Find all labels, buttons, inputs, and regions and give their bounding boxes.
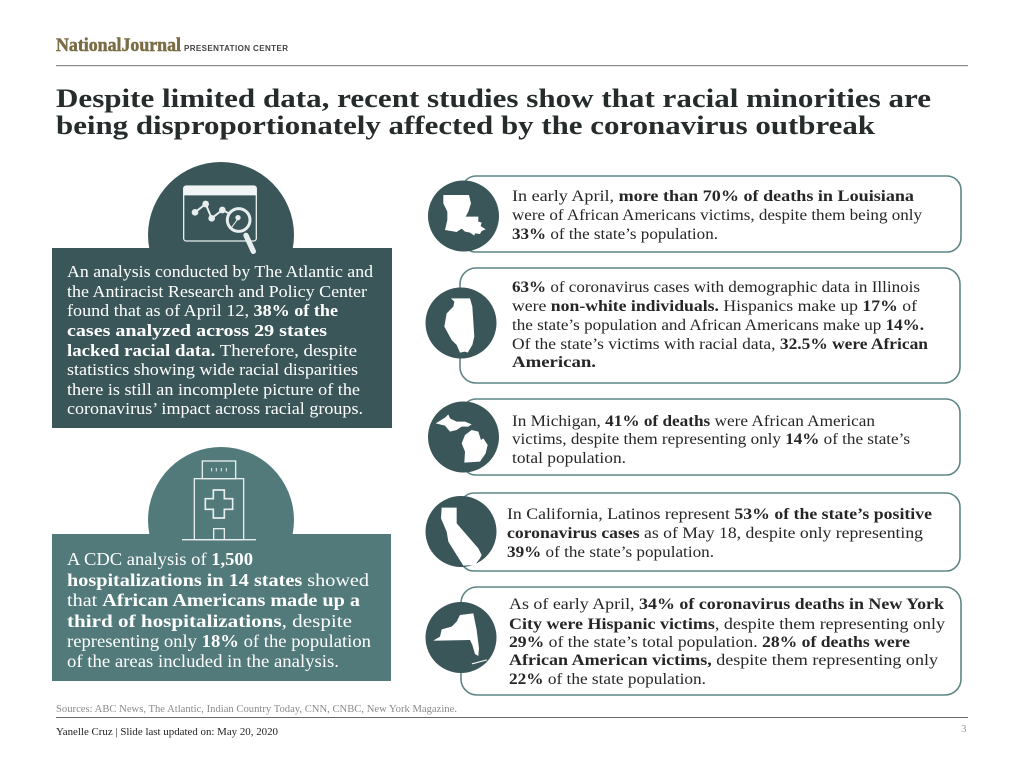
callout: Illinois xyxy=(426,268,960,383)
logo: PRESENTATION CENTER xyxy=(184,44,288,53)
title: being disproportionately affected by the coronavirus outbreak xyxy=(56,110,875,140)
callout: Illinois: were non-white individuals. Hispanics make up 17% of xyxy=(512,298,918,315)
callout: New York: As of early April, 34% of coronavirus deaths in New York xyxy=(509,596,944,613)
page number: 3 xyxy=(961,723,967,735)
text: CDC: of the areas included in the analysis. xyxy=(67,651,339,671)
callout: Michigan: In Michigan, 41% of deaths were African American xyxy=(512,413,875,430)
panel: Atlantic analysis xyxy=(52,162,392,428)
callout: New York: 22% of the state population. xyxy=(509,671,706,688)
text: analysis: cases analyzed across 29 states xyxy=(67,321,327,340)
callout: Michigan: victims, despite them representing only 14% of the state’s xyxy=(512,431,910,448)
icon: California xyxy=(441,508,482,566)
title xyxy=(56,83,931,140)
text: CDC: third of hospitalizations , despite xyxy=(67,611,352,631)
text: CDC: A CDC analysis of 1,500 xyxy=(67,549,253,569)
text: analysis: coronavirus’ impact across racial groups. xyxy=(67,399,363,418)
text: CDC: representing only 18% of the population xyxy=(67,631,371,651)
callout: California: In California, Latinos represent 53% of the state’s positive xyxy=(507,506,932,523)
callout: California: 39% of the state’s population. xyxy=(507,544,714,561)
icon: Louisiana xyxy=(443,195,486,236)
icon: hospital xyxy=(182,461,256,540)
text: CDC: hospitalizations in 14 states showed xyxy=(67,570,369,590)
text: CDC: that African Americans made up a xyxy=(67,590,360,610)
text: CDC xyxy=(67,549,371,671)
callout: Illinois: 63% of coronavirus cases with demographic data in Illinois xyxy=(512,279,920,296)
callout: Louisiana: 33% of the state’s population. xyxy=(512,226,718,243)
panel: CDC analysis xyxy=(52,447,391,681)
callout: New York: African American victims, despite them representing only xyxy=(509,652,938,669)
icon: Michigan xyxy=(436,414,488,463)
title: Despite limited data, recent studies show that racial minorities are xyxy=(56,83,931,113)
text: analysis: lacked racial data. Therefore, despite xyxy=(67,341,357,360)
callout: New York xyxy=(426,587,961,695)
callout: Illinois: American. xyxy=(512,354,596,371)
callout: California: coronavirus cases as of May 18, despite only representing xyxy=(507,525,923,542)
callout: Michigan: total population. xyxy=(512,450,626,467)
callout: New York: 29% of the state’s total population. 28% of deaths were xyxy=(509,634,910,651)
logo xyxy=(56,35,288,56)
author line: Yanelle Cruz | Slide last updated on: May 20, 2020 xyxy=(56,726,278,738)
text: analysis xyxy=(67,262,373,418)
callout: Louisiana xyxy=(428,176,961,252)
callout: California xyxy=(426,493,960,571)
icon: New York xyxy=(433,613,487,664)
text: analysis: An analysis conducted by The Atlantic and xyxy=(67,262,373,281)
text: analysis: there is still an incomplete picture of the xyxy=(67,380,360,399)
callout: New York: City were Hispanic victims , despite them representing only xyxy=(509,616,945,633)
text: analysis: statistics showing wide racial disparities xyxy=(67,360,358,379)
icon: Illinois xyxy=(444,298,474,353)
callout: Michigan xyxy=(428,399,960,475)
callout: Louisiana: were of African Americans victims, despite them being only xyxy=(512,207,922,224)
callout: Louisiana: In early April, more than 70% of deaths in Louisiana xyxy=(512,188,914,205)
logo: NationalJournal xyxy=(56,35,181,56)
callout: Illinois: Of the state’s victims with racial data, 32.5% were African xyxy=(512,336,928,353)
text: analysis: found that as of April 12, 38% of the xyxy=(67,301,338,320)
text: analysis: the Antiracist Research and Policy Center xyxy=(67,282,368,301)
icon: chart window with magnifier xyxy=(184,186,256,251)
callout: Illinois: the state’s population and African Americans make up 14%. xyxy=(512,317,924,334)
sources: Sources: ABC News, The Atlantic, Indian Country Today, CNN, CNBC, New York Magazine. xyxy=(56,704,457,715)
